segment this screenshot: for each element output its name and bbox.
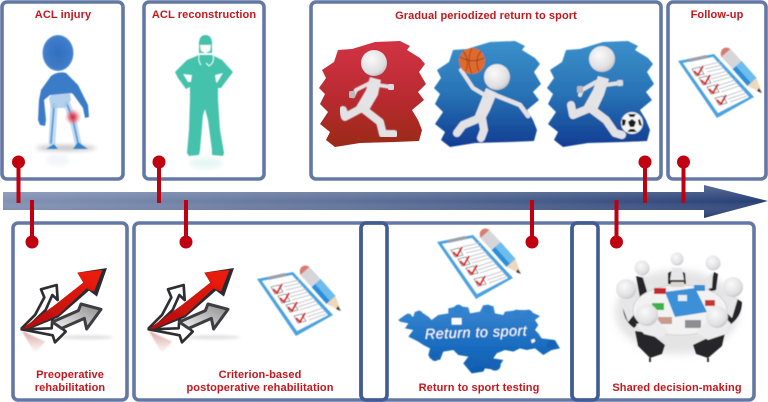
icon: puzzle with return to sport: Return to sport <box>425 323 528 343</box>
icon: runner on red paint <box>319 41 426 147</box>
heading: gradual periodized return to sport: Gradual periodized return to sport <box>395 10 577 22</box>
heading: preoperative rehabilitation: Preoperative <box>36 369 104 381</box>
heading: follow-up: Follow-up <box>691 9 744 21</box>
timeline arrow <box>3 185 768 218</box>
marker: ACL reconstruction <box>152 156 166 203</box>
panel: preoperative rehabilitation <box>13 200 127 400</box>
icon: soccer player on blue paint <box>547 41 654 147</box>
heading: criterion-based postoperative rehabilitation: Criterion-based <box>219 369 301 381</box>
icon: rising arrows <box>149 268 240 353</box>
icon: surgeon silhouette <box>175 35 233 169</box>
heading: return to sport testing: Return to sport testing <box>419 382 539 394</box>
icon: clipboard and pencil <box>678 48 762 118</box>
heading: ACL reconstruction: ACL reconstruction <box>152 9 256 21</box>
marker: shared decision-making <box>610 200 623 248</box>
icon: group around puzzle table <box>615 252 743 362</box>
panel: shared decision-making <box>572 200 754 400</box>
marker: return to sport testing <box>526 200 538 248</box>
panel: gradual periodized return to sport <box>311 2 661 203</box>
marker: criterion-based <box>180 200 192 248</box>
marker: preoperative <box>26 200 38 248</box>
icon: rising arrows <box>22 268 113 353</box>
marker: return to sport <box>638 156 652 203</box>
panel: criterion-based postoperative rehabilitation <box>134 200 388 400</box>
marker: follow-up <box>677 156 690 203</box>
panel: return to sport testing <box>361 200 598 400</box>
icon: clipboard and pencil <box>437 228 521 299</box>
heading: criterion-based postoperative rehabilitation: postoperative rehabilitation <box>186 382 334 394</box>
heading: ACL injury: ACL injury <box>35 9 92 21</box>
panel: ACL injury <box>2 2 123 203</box>
icon: puzzle with return to sport <box>398 305 560 373</box>
heading: shared decision-making: Shared decision-making <box>612 382 742 394</box>
panel: follow-up <box>668 2 766 203</box>
heading: preoperative rehabilitation: rehabilitation <box>35 382 105 394</box>
panel: ACL reconstruction <box>144 2 264 203</box>
marker: ACL injury <box>12 156 25 203</box>
icon: basketball player on blue paint <box>434 41 541 147</box>
icon: injured blue figure with knee highlight <box>36 35 96 166</box>
icon: clipboard and pencil <box>257 266 341 336</box>
